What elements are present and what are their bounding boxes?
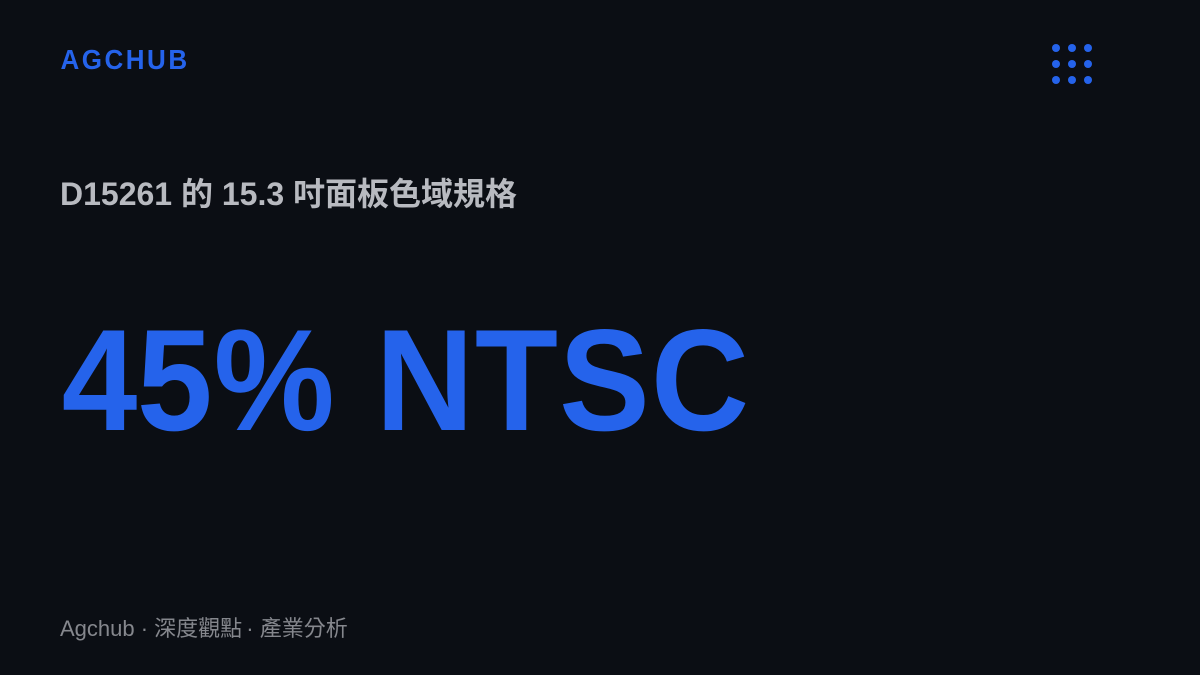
footer text: Agchub · 深度觀點 · 產業分析 (60, 616, 348, 640)
icon: dot grid (1052, 44, 1092, 84)
headline metric: 45% NTSC (62, 299, 750, 460)
subtitle: D15261 的 15.3 吋面板色域規格 (60, 176, 517, 212)
brand logo text: AGCHUB (60, 44, 190, 75)
